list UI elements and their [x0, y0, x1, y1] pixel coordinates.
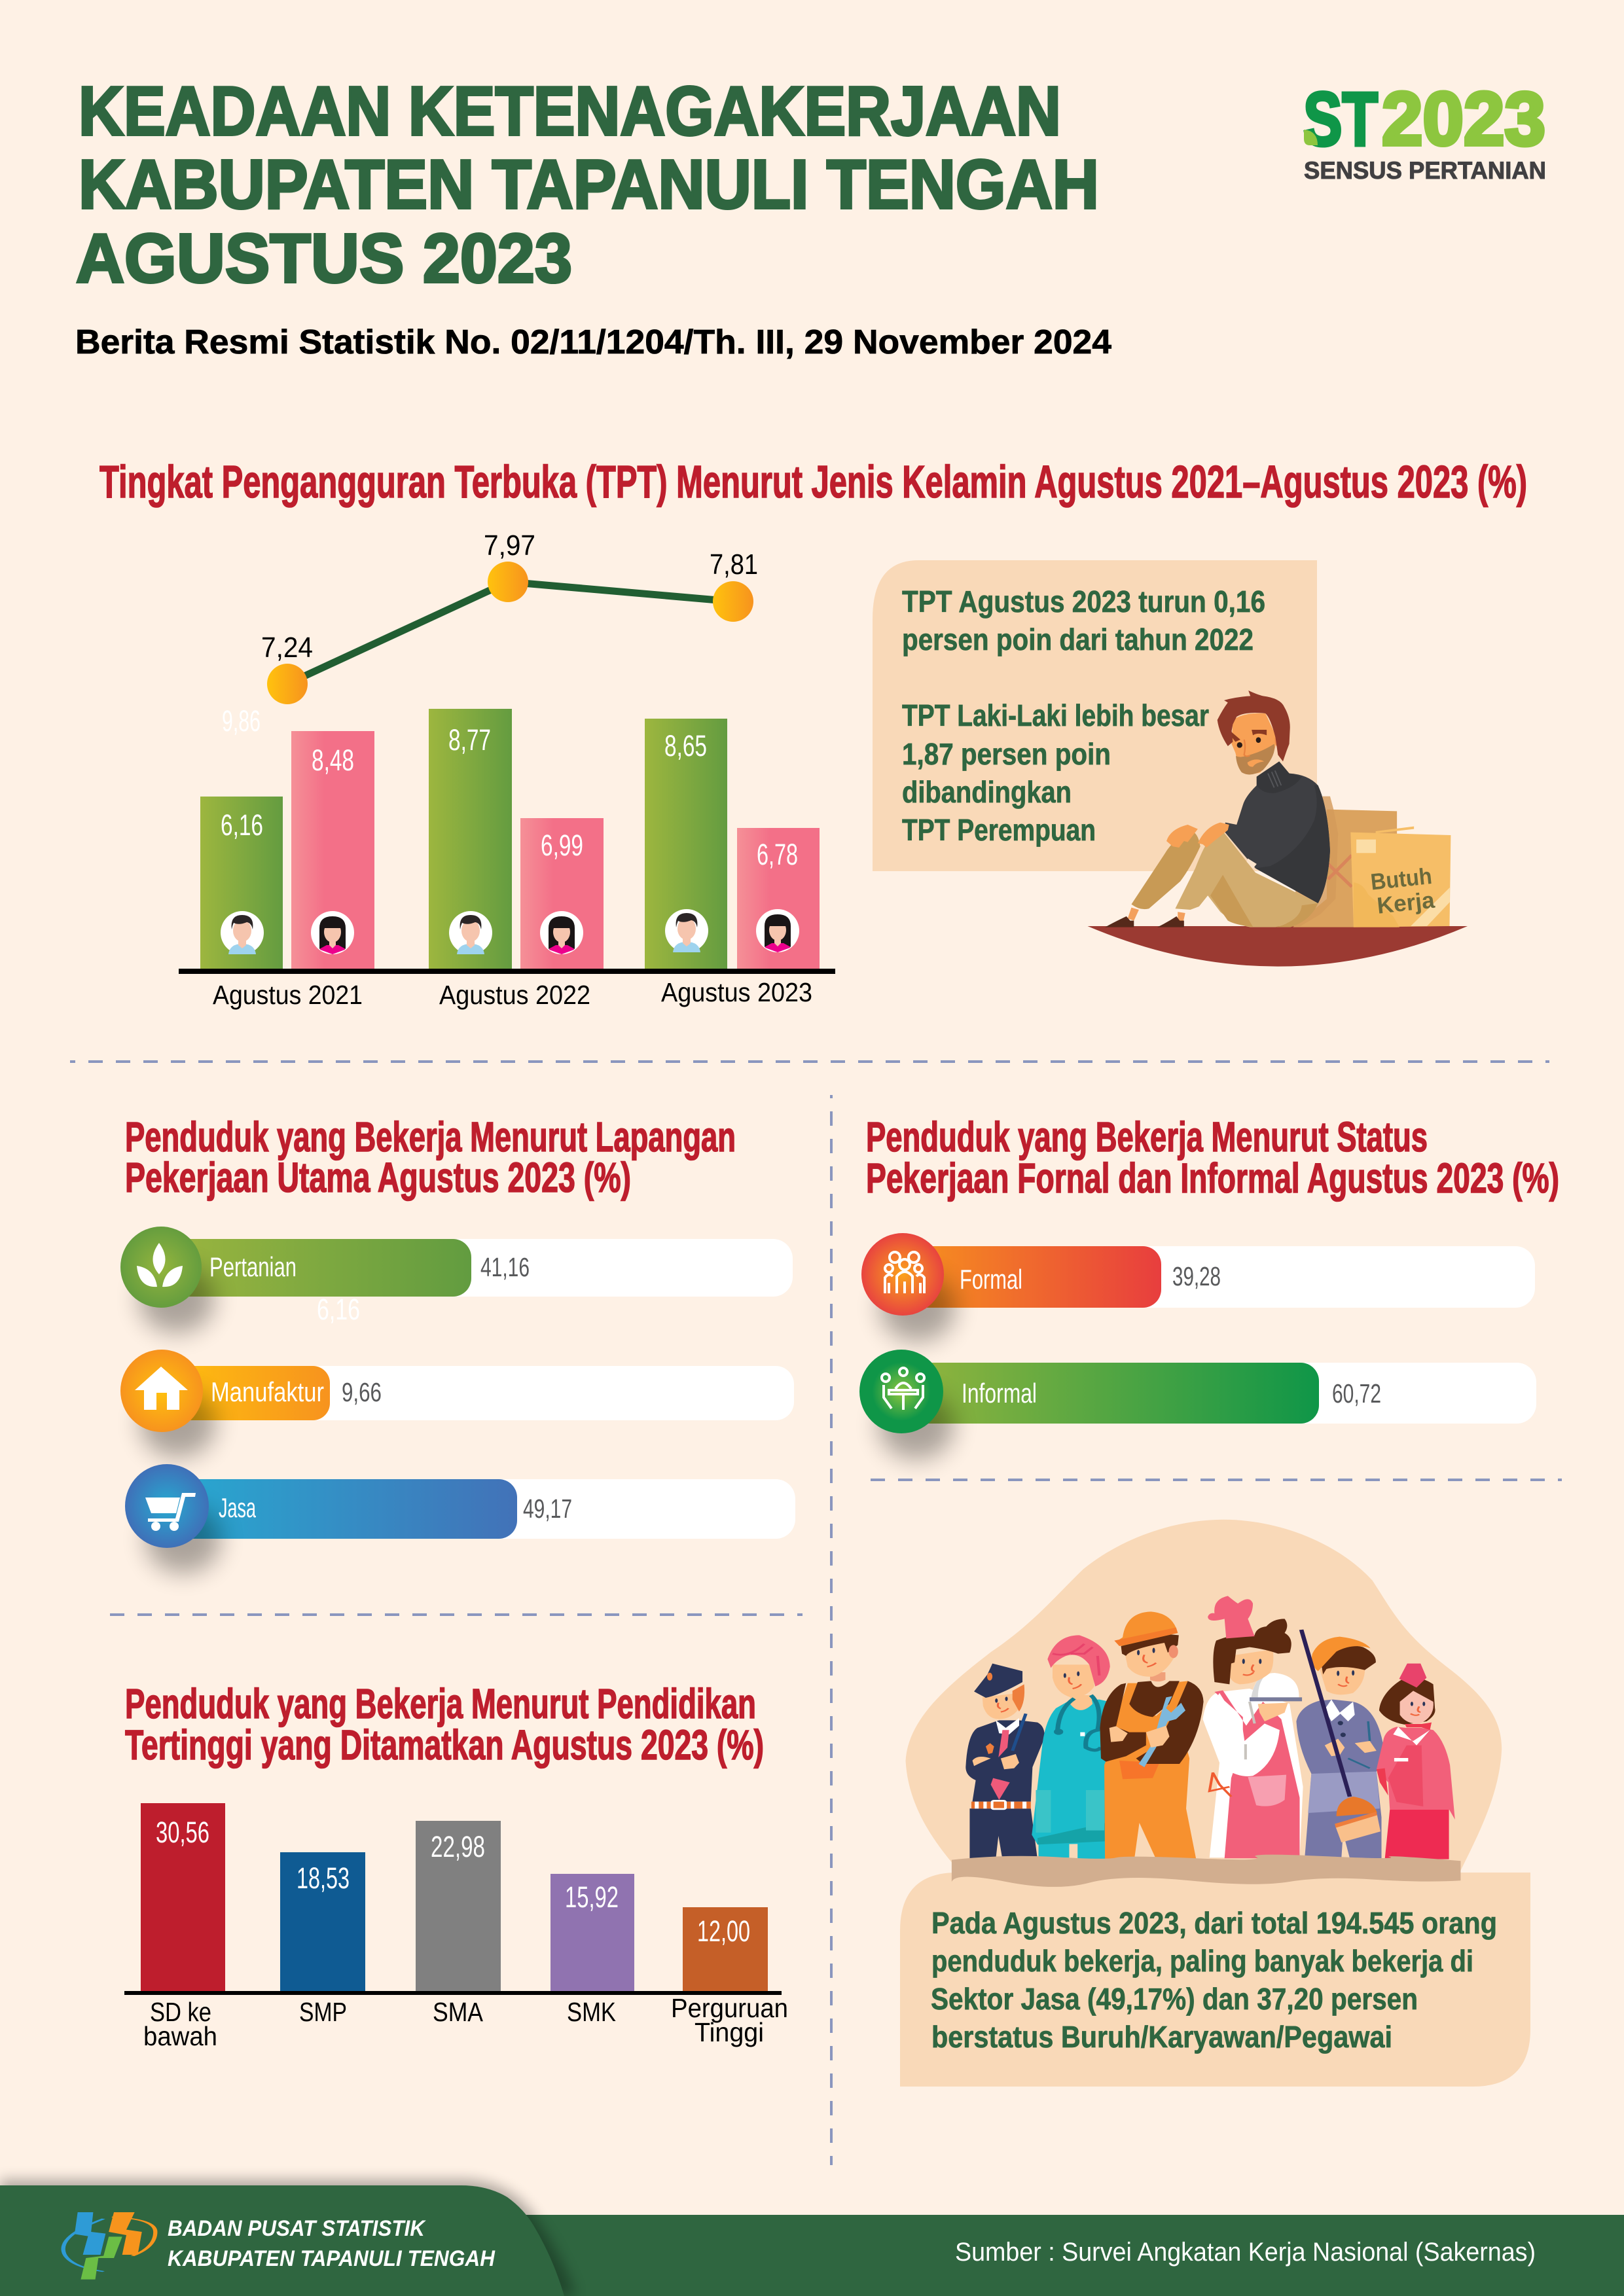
agency name	[168, 2216, 496, 2271]
heading: Penduduk yang Bekerja Menurut Pendidikan	[125, 1680, 756, 1727]
axis labels: SMP	[299, 1997, 347, 2027]
callout text: dibandingkan	[902, 775, 1072, 809]
worker: cleaner	[1296, 1630, 1385, 1858]
worker: chef	[1203, 1596, 1303, 1858]
axis line	[179, 969, 835, 974]
icon: meeting	[882, 1368, 924, 1410]
bar row: Informal	[859, 1350, 1536, 1460]
axis labels	[213, 977, 812, 1010]
divider: left column	[110, 1613, 803, 1616]
line values: 7,24	[261, 632, 313, 664]
summary text: Pada Agustus 2023, dari total 194.545 orang	[931, 1906, 1497, 1940]
axis labels: bawah	[143, 2021, 217, 2051]
bars	[141, 1803, 768, 1992]
axis labels: Agustus 2023	[661, 977, 812, 1007]
callout text: 1,87 persen poin	[902, 737, 1111, 771]
callout text: TPT Perempuan	[902, 813, 1096, 847]
bar values: 8,77	[448, 723, 491, 757]
worker: police	[965, 1664, 1045, 1859]
bar row: Jasa: 49,17	[523, 1494, 572, 1524]
box text	[1369, 863, 1436, 919]
ground band	[952, 1855, 1460, 1887]
summary text: berstatus Buruh/Karyawan/Pegawai	[931, 2020, 1392, 2054]
line values: 7,97	[484, 529, 535, 562]
footer tab shadow	[0, 2179, 576, 2296]
bar row: Pertanian	[120, 1227, 793, 1333]
illustration: workers on blob	[906, 1520, 1502, 1872]
bar row: Manufaktur: 9,66	[342, 1377, 382, 1407]
chart: TPT bars and line	[179, 529, 835, 1010]
summary text: Sektor Jasa (49,17%) dan 37,20 persen	[931, 1982, 1418, 2016]
callout text	[902, 584, 1265, 847]
axis labels: SMA	[433, 1997, 484, 2027]
section: pendidikan	[124, 1680, 788, 2051]
box text: Kerja	[1376, 888, 1436, 919]
bar row: Informal: Informal	[962, 1378, 1037, 1408]
logo: ST2023 Sensus Pertanian: SENSUS PERTANIAN	[1304, 157, 1546, 184]
title	[76, 73, 1099, 297]
source: Sumber : Survei Angkatan Kerja Nasional (Sakernas)	[955, 2238, 1536, 2267]
worker: mechanic	[1100, 1611, 1204, 1859]
axis line	[124, 1991, 782, 1995]
footer	[0, 2179, 1624, 2296]
box text: Butuh	[1369, 863, 1434, 895]
panel: workers summary	[900, 1855, 1530, 2087]
axis labels: SD ke	[150, 1997, 211, 2027]
bar values: 12,00	[697, 1914, 750, 1948]
callout text: persen poin dari tahun 2022	[902, 622, 1254, 656]
stray value: 6,16	[317, 1293, 360, 1326]
logo: ST2023 Sensus Pertanian: ST	[1303, 77, 1378, 162]
bar values: 9,86	[222, 704, 261, 738]
footer tab	[0, 2185, 564, 2296]
divider: main vertical	[830, 1095, 833, 2165]
panel: TPT callout	[873, 560, 1317, 871]
heading	[866, 1113, 1559, 1202]
axis labels: Perguruan	[671, 1993, 788, 2023]
bar values: 22,98	[431, 1830, 485, 1863]
bar values: 30,56	[156, 1816, 209, 1849]
footer band	[0, 2215, 1624, 2296]
bar row: Pertanian: Pertanian	[209, 1251, 297, 1282]
title: AGUSTUS 2023	[76, 220, 572, 297]
summary text: penduduk bekerja, paling banyak bekerja di	[931, 1944, 1473, 1978]
bar row: Jasa: Jasa	[219, 1492, 256, 1523]
divider: main horizontal	[70, 1060, 1549, 1063]
heading	[125, 1113, 736, 1201]
bar values: 6,99	[541, 829, 583, 862]
axis labels: Agustus 2022	[439, 980, 590, 1010]
bar values: 6,16	[221, 808, 263, 842]
bar row: Manufaktur	[120, 1350, 794, 1458]
icon: leaves	[137, 1243, 183, 1287]
bar values	[156, 1816, 750, 1948]
avatars	[221, 909, 799, 954]
callout text: TPT Agustus 2023 turun 0,16	[902, 584, 1265, 619]
agency name: BADAN PUSAT STATISTIK	[168, 2216, 426, 2241]
bar values: 15,92	[565, 1880, 619, 1914]
bar row: Pertanian: 41,16	[480, 1252, 530, 1282]
heading	[125, 1680, 764, 1768]
bar row: Formal	[861, 1233, 1535, 1342]
subtitle: Berita Resmi Statistik No. 02/11/1204/Th. III, 29 November 2024	[75, 323, 1111, 361]
logo: ST2023 Sensus Pertanian: 2023	[1382, 77, 1545, 161]
line nodes	[267, 562, 753, 704]
bar values: 6,78	[757, 838, 798, 871]
divider: right column	[871, 1479, 1562, 1481]
logo: ST2023 Sensus Pertanian	[1303, 77, 1546, 184]
bar values: 8,48	[312, 744, 354, 777]
callout text: TPT Laki-Laki lebih besar	[902, 698, 1209, 732]
icon: cart	[145, 1493, 196, 1531]
title: KEADAAN KETENAGAKERJAAN	[79, 73, 1061, 150]
axis labels: SMK	[567, 1997, 616, 2027]
bar row: Formal: Formal	[960, 1264, 1022, 1295]
illustration: unemployed man with boxes	[1087, 691, 1468, 967]
summary text	[931, 1906, 1497, 2054]
worker: flight attendant	[1377, 1664, 1455, 1859]
icon: house	[135, 1367, 188, 1410]
bar row: Formal: 39,28	[1172, 1261, 1221, 1291]
line values: 7,81	[710, 548, 758, 581]
bar values: 18,53	[297, 1861, 350, 1895]
title: KABUPATEN TAPANULI TENGAH	[79, 146, 1099, 223]
logo: BPS	[63, 2212, 155, 2280]
heading: Penduduk yang Bekerja Menurut Lapangan	[125, 1113, 736, 1160]
section: status pekerjaan	[859, 1113, 1559, 1460]
heading: Tertinggi yang Ditamatkan Agustus 2023 (%)	[125, 1721, 764, 1768]
line values	[261, 529, 758, 664]
line: total TPT	[287, 582, 733, 684]
bar values	[221, 704, 798, 871]
heading: Pekerjaan Utama Agustus 2023 (%)	[125, 1154, 631, 1201]
bars: male and female per year	[200, 709, 820, 969]
agency name: KABUPATEN TAPANULI TENGAH	[168, 2246, 496, 2271]
axis labels: Agustus 2021	[213, 980, 363, 1010]
worker: nurse	[1031, 1635, 1110, 1859]
section: lapangan pekerjaan	[120, 1113, 795, 1573]
bar values: 8,65	[664, 729, 707, 762]
bar row: Informal: 60,72	[1332, 1378, 1381, 1408]
icon: people	[885, 1252, 924, 1293]
bar row: Jasa	[125, 1464, 795, 1573]
bar row: Manufaktur: Manufaktur	[211, 1376, 324, 1407]
axis labels: Tinggi	[695, 2017, 764, 2047]
axis labels	[143, 1993, 788, 2051]
